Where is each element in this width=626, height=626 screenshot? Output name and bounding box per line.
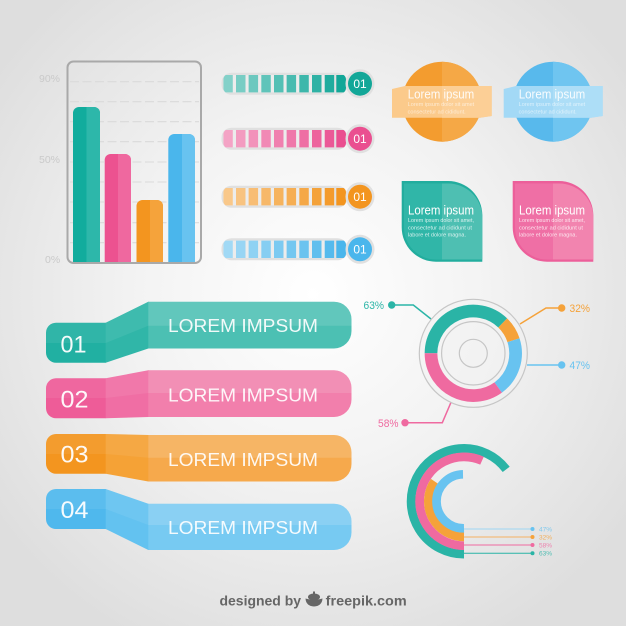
ribbon text: consectetur ad cididunt.: [519, 110, 577, 116]
banner number: 01: [60, 332, 86, 358]
ribbon text: Lorem ipsum: [408, 88, 474, 102]
ribbon badge: blue circle: [504, 62, 603, 142]
banner 01: teal: [46, 302, 352, 363]
callout: 58%: 58%: [378, 418, 399, 430]
card text: [408, 203, 474, 239]
ribbon text: [519, 88, 586, 116]
concentric arc chart with legend: [411, 448, 552, 558]
bar: orange: [136, 200, 163, 262]
card text: consectetur ad cididunt ut: [519, 225, 584, 231]
ribbon: [504, 86, 603, 118]
callout: 63%: 63%: [364, 300, 384, 312]
ribbon text: consectetur ad cididunt.: [408, 110, 466, 116]
card text: [519, 203, 585, 239]
bar: blue: [168, 134, 195, 262]
axis labels: 50%: [39, 154, 60, 166]
footer credit: [220, 592, 407, 609]
banner number: 03: [60, 442, 88, 469]
banner label: LOREM IMPSUM: [168, 385, 318, 406]
ribbon badge: orange circle: [392, 62, 492, 142]
progress bar: teal: [222, 69, 374, 98]
progress bar: pink: [222, 124, 374, 153]
bar chart: percentage columns: [39, 62, 201, 266]
donut chart with callouts: [364, 299, 590, 430]
card text: Lorem ipsum: [408, 203, 474, 217]
banner label: LOREM IMPSUM: [168, 517, 318, 538]
bar: teal: [73, 107, 100, 262]
card text: labore et dolore magna.: [519, 233, 577, 239]
banner number: 04: [60, 497, 88, 524]
concentric arc chart with legend: 47%: [539, 526, 552, 533]
concentric arc chart with legend: 32%: [539, 534, 552, 542]
progress bar: orange: [222, 182, 374, 211]
banner label: LOREM IMPSUM: [168, 315, 318, 336]
footer credit: designed by: [220, 593, 301, 609]
concentric arc chart with legend: 63%: [539, 551, 552, 558]
leaf card: teal: [402, 181, 482, 262]
card text: Lorem ipsum dolor sit amet,: [408, 218, 474, 224]
bar: pink: [105, 154, 131, 262]
number badge: 01: [353, 77, 367, 91]
banner number: 02: [60, 387, 88, 414]
number badge: [346, 182, 374, 211]
card text: labore et dolore magna.: [408, 233, 466, 239]
number badge: 01: [353, 132, 367, 146]
ribbon text: [408, 88, 475, 116]
ribbon text: Lorem ipsum dolor sit amet: [408, 102, 475, 108]
ribbon: [392, 86, 492, 118]
banner 02: pink: [46, 370, 352, 418]
number badge: 01: [353, 190, 367, 204]
number badge: 01: [353, 243, 367, 257]
axis labels: 0%: [45, 254, 60, 266]
ribbon text: Lorem ipsum: [519, 88, 585, 102]
banner 04: blue: [46, 489, 352, 550]
number badge: [346, 235, 374, 264]
card text: consectetur ad cididunt ut: [408, 225, 473, 231]
ribbon text: Lorem ipsum dolor sit amet: [519, 102, 586, 108]
callout: 32%: 32%: [570, 303, 590, 315]
legend: [464, 527, 534, 555]
donut segments: [431, 311, 516, 396]
callout: 47%: 47%: [570, 360, 590, 372]
card text: Lorem ipsum dolor sit amet,: [519, 218, 585, 224]
callout: 58%: [378, 402, 451, 430]
progress bar: blue: [222, 235, 374, 264]
leaf card: pink: [513, 181, 593, 262]
concentric arc chart with legend: 58%: [539, 542, 552, 550]
arcs: [411, 448, 506, 554]
axis labels: [39, 73, 60, 266]
callout: 32%: [520, 303, 590, 324]
number badge: [346, 69, 374, 98]
banner label: LOREM IMPSUM: [168, 449, 318, 470]
callout: 63%: [364, 300, 431, 319]
icon: freepik logo: [306, 592, 322, 606]
axis labels: 90%: [39, 73, 60, 85]
banner 03: orange: [46, 434, 352, 482]
chart frame: [68, 62, 201, 263]
card text: Lorem ipsum: [519, 203, 585, 217]
footer credit: freepik.com: [326, 593, 407, 609]
number badge: [346, 124, 374, 153]
callout: 47%: [527, 360, 590, 372]
